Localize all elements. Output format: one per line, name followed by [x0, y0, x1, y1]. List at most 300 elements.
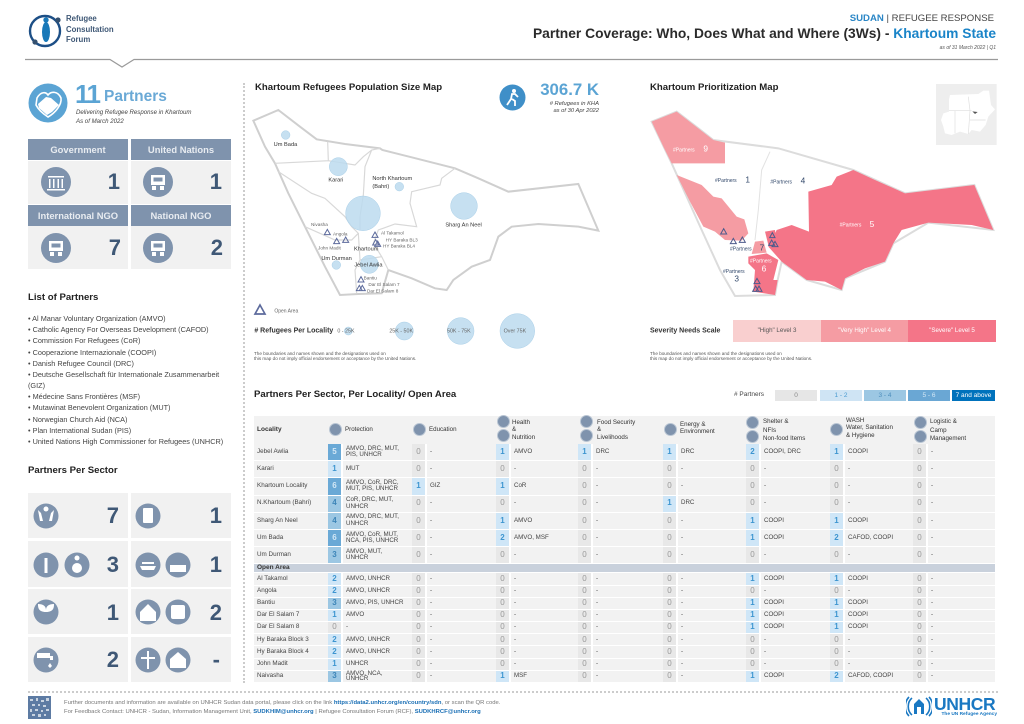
table: partners per sector per locality: 1 [834, 574, 839, 583]
panel: partners per sector: 1 [210, 552, 222, 577]
proportional bubbles [281, 131, 535, 348]
map disclaimer [650, 351, 812, 361]
map: refugee population by locality: Dar El Salam 8 [367, 289, 399, 294]
table: partners per sector per locality: 0 [582, 598, 587, 607]
map: refugee population by locality: Jebel Awlia [354, 263, 383, 269]
map disclaimer: The boundaries and names shown and the designations used on [650, 351, 782, 356]
logo: UNHCR: The UN Refugee Agency [941, 712, 997, 717]
table: partners per sector per locality: - [931, 448, 933, 455]
legend: number of partners: 0 [794, 392, 798, 399]
inset map of Sudan [936, 84, 997, 145]
table: partners per sector per locality: 0 [834, 586, 839, 595]
table: partners per sector per locality: AMVO, CoR, MUT, [346, 531, 398, 538]
table: partners per sector per locality: MUT, PIS, UNHCR [346, 485, 398, 492]
table: partners per sector per locality: 0 [917, 622, 922, 631]
table: partners per sector per locality: 0 [917, 659, 922, 668]
legend: number of partners: 7 and above [956, 392, 991, 399]
list of partners: • Plan International Sudan (PIS) [28, 426, 131, 435]
table: partners per sector per locality: COOPI, DRC [764, 448, 801, 455]
table: partners per sector per locality: - [596, 465, 598, 472]
table header: Energy & [680, 421, 705, 428]
title block: as of 31 March 2022 | Q1 [940, 45, 996, 51]
table: partners per sector per locality: - [764, 587, 766, 594]
table: partners per sector per locality: - [514, 611, 516, 618]
table: partners per sector per locality: AMVO, NCA, [346, 670, 382, 677]
table: partners per sector per locality: - [430, 465, 432, 472]
table header: Logistic & [930, 418, 957, 425]
partners total: Partners [104, 88, 167, 105]
table: partners per sector per locality: 0 [416, 598, 421, 607]
table: partners per sector per locality: 0 [500, 464, 505, 473]
map: refugee population by locality: Khartoum [354, 247, 379, 253]
table: partners per sector per locality: 1 [834, 447, 839, 456]
table: partners per sector per locality: 0 [917, 550, 922, 559]
table: partners per sector per locality: - [764, 482, 766, 489]
table: partners per sector per locality: 0 [582, 516, 587, 525]
table: partners per sector per locality: 0 [416, 671, 421, 680]
map: prioritization: 9 [703, 144, 708, 154]
table: partners per sector per locality: 0 [416, 498, 421, 507]
table: partners per sector per locality: - [931, 534, 933, 541]
table: partners per sector per locality: - [596, 611, 598, 618]
table header: Shelter & [763, 418, 788, 425]
table header: Non-food Items [763, 435, 805, 442]
table: partners per sector per locality: 2 [332, 647, 337, 656]
table: partners per sector per locality: - [596, 551, 598, 558]
table: partners per sector per locality: AMVO, UNHCR [346, 636, 390, 643]
table: partners per sector per locality: 0 [750, 647, 755, 656]
map: refugee population by locality: (Bahri) [372, 184, 389, 190]
table: partners per sector per locality: DRC [681, 499, 694, 506]
map: refugee population by locality: North Khartoum [372, 176, 413, 182]
table: partners per sector per locality: - [681, 534, 683, 541]
map: prioritization: 3 [734, 273, 739, 283]
table: partners per sector per locality: AMVO, UNHCR [346, 587, 390, 594]
table: partners per sector per locality: 0 [582, 533, 587, 542]
legend: number of partners [734, 390, 995, 401]
table: partners per sector per locality: - [514, 636, 516, 643]
map: prioritization [650, 84, 996, 335]
table: partners per sector per locality: 0 [834, 464, 839, 473]
table: partners per sector per locality: 0 [582, 574, 587, 583]
table: partners per sector per locality: - [430, 611, 432, 618]
table: partners per sector per locality: 0 [500, 498, 505, 507]
table: partners per sector per locality: 0 [834, 498, 839, 507]
map: prioritization: 5 [870, 219, 875, 229]
table: partners per sector per locality: 2 [834, 533, 839, 542]
table: partners per sector per locality: - [596, 660, 598, 667]
table: partners per sector per locality: COOPI [848, 611, 868, 618]
footer text: Further documents and information are available on UNHCR Sudan data portal, please click on the link https://data2.unhcr.org/en/country/sdn, or scan the QR code. [64, 700, 500, 706]
table: partners per sector per locality: COOPI [848, 623, 868, 630]
map: refugee population by locality: HY Baraka BL4 [383, 244, 415, 249]
heading: prioritization map: Khartoum Prioritization Map [650, 82, 778, 93]
table: partners per sector per locality: COOPI [764, 534, 784, 541]
table: partners per sector per locality: 0 [917, 516, 922, 525]
table: partners per sector per locality: 1 [500, 447, 505, 456]
severity scale: "High" Level 3 [758, 327, 796, 334]
table: partners per sector per locality: - [681, 636, 683, 643]
table: partners per sector per locality: 0 [582, 647, 587, 656]
table: partners per sector per locality: 0 [750, 464, 755, 473]
map: prioritization: 7 [760, 243, 765, 253]
map: refugee population by locality: Um Durman [321, 256, 352, 262]
panel: partner types: United Nations [148, 144, 214, 155]
logo: Refugee Consultation Forum: Refugee [66, 14, 97, 23]
table: partners per sector per locality: 1 [750, 598, 755, 607]
table: partners per sector per locality: AMVO [346, 611, 364, 618]
table: partners per sector per locality: - [848, 482, 850, 489]
table: partners per sector per locality: 0 [500, 586, 505, 595]
table: partners per sector per locality: GIZ [430, 482, 440, 489]
table: partners per sector per locality: AMVO, MUT, [346, 548, 382, 555]
table: partners per sector per locality: 2 [500, 533, 505, 542]
map: prioritization: #Partners [730, 247, 752, 253]
panel: partner types: 1 [210, 169, 222, 194]
table: partners per sector per locality: - [430, 575, 432, 582]
map: refugee population by locality: Nivasha [311, 222, 328, 227]
table: partners per sector per locality: - [596, 517, 598, 524]
table: partners per sector per locality: 1 [500, 671, 505, 680]
heading: partners per sector per locality: Partners Per Sector, Per Locality/ Open Area [254, 389, 456, 400]
table: partners per sector per locality: COOPI [764, 599, 784, 606]
icon: handshake [28, 84, 68, 122]
table: partners per sector per locality: 0 [582, 498, 587, 507]
table: partners per sector per locality: - [764, 465, 766, 472]
table header: NFIs [763, 426, 776, 434]
partners total [28, 79, 192, 125]
panel: partners per sector: 3 [107, 552, 119, 577]
legend: number of partners: # Partners [734, 391, 764, 398]
table: partners per sector per locality: - [681, 672, 683, 679]
panel: partners per sector [28, 493, 231, 682]
table: partners per sector per locality: 0 [917, 610, 922, 619]
table: partners per sector per locality: Dar El Salam 7 [257, 611, 299, 618]
footer text: For Feedback Contact: UNHCR - Sudan, Information Management Unit, SUDKHIM@unhcr.org | Refugee Consultation Forum (RCF), SUDKHRCF@unhcr.org [64, 709, 481, 715]
vertical dotted divider [243, 83, 245, 683]
map: refugee population by locality: Dar El Salam 7 [368, 282, 400, 287]
table: partners per sector per locality: - [931, 648, 933, 655]
table: partners per sector per locality: 4 [332, 498, 337, 507]
table: partners per sector per locality: 2 [834, 671, 839, 680]
table: partners per sector per locality: AMVO [514, 517, 532, 524]
table: partners per sector per locality: AMVO, CoR, DRC, [346, 479, 399, 486]
table: partners per sector per locality: - [681, 660, 683, 667]
table: partners per sector per locality: - [848, 648, 850, 655]
table: partners per sector per locality: John Madit [257, 660, 288, 667]
table: partners per sector per locality: 0 [750, 586, 755, 595]
table: partners per sector per locality: - [430, 587, 432, 594]
table: partners per sector per locality: DRC [596, 448, 609, 455]
table: partners per sector per locality: 0 [416, 533, 421, 542]
table: partners per sector per locality: 0 [416, 622, 421, 631]
table: partners per sector per locality: - [596, 482, 598, 489]
table: partners per sector per locality: - [681, 465, 683, 472]
table: partners per sector per locality: 1 [750, 671, 755, 680]
panel: partner types: Government [50, 144, 106, 155]
table: partners per sector per locality: - [764, 551, 766, 558]
table header: Locality [257, 426, 282, 433]
table: partners per sector per locality: 1 [750, 516, 755, 525]
table: partners per sector per locality: 0 [582, 464, 587, 473]
refugee total [500, 80, 599, 114]
list of partners: • Médecine Sans Frontières (MSF) [28, 392, 140, 401]
table header: & [512, 426, 516, 433]
map disclaimer: this map do not imply official endorsement or acceptance by the United Nations. [254, 356, 416, 361]
table: partners per sector per locality: CAFOD, COOPI [848, 534, 893, 541]
table: partners per sector per locality: - [596, 672, 598, 679]
list of partners [28, 314, 223, 446]
table: partners per sector per locality: 0 [500, 550, 505, 559]
table: partners per sector per locality: - [931, 611, 933, 618]
logo: UNHCR: UNHCR [934, 694, 995, 714]
table header: & [597, 426, 601, 433]
table: partners per sector per locality: 0 [667, 659, 672, 668]
table: partners per sector per locality: - [430, 517, 432, 524]
table: partners per sector per locality: AMVO, MSF [514, 534, 549, 541]
table: partners per sector per locality: - [596, 587, 598, 594]
table: partners per sector per locality: - [514, 499, 516, 506]
table: partners per sector per locality: 3 [332, 550, 337, 559]
table: partners per sector per locality: - [764, 499, 766, 506]
table: partners per sector per locality: Dar El Salam 8 [257, 623, 299, 630]
table: partners per sector per locality: 0 [416, 464, 421, 473]
table: partners per sector per locality: 0 [750, 550, 755, 559]
list of partners: • Norwegian Church Aid (NCA) [28, 415, 127, 424]
table: partners per sector per locality: CoR [514, 482, 526, 489]
table: partners per sector per locality: - [430, 599, 432, 606]
table: partners per sector per locality: - [681, 517, 683, 524]
table: partners per sector per locality: 0 [667, 574, 672, 583]
table: partners per sector per locality: 0 [416, 610, 421, 619]
table header: Livelihoods [597, 434, 628, 441]
table: partners per sector per locality: 0 [500, 610, 505, 619]
table: partners per sector per locality: - [931, 599, 933, 606]
table: partners per sector per locality: UNHCR [346, 503, 368, 510]
severity scale: "Very High" Level 4 [838, 327, 891, 334]
list of partners: • Commission For Refugees (CoR) [28, 336, 140, 345]
table header: Management [930, 435, 966, 442]
list of partners: • Al Manar Voluntary Organization (AMVO) [28, 314, 166, 323]
table: partners per sector per locality: - [764, 648, 766, 655]
table: partners per sector per locality: - [430, 660, 432, 667]
map: refugee population by locality: 25K - 50K [389, 328, 413, 334]
map: prioritization: 4 [801, 176, 806, 186]
table header: Water, Sanitation [846, 424, 893, 431]
table: partners per sector per locality: NCA, PIS, UNHCR [346, 537, 398, 544]
table: partners per sector per locality: CAFOD, COOPI [848, 672, 893, 679]
map: prioritization: #Partners [673, 147, 695, 153]
table: partners per sector per locality: COOPI [764, 517, 784, 524]
table: partners per sector per locality: 4 [332, 516, 337, 525]
table: partners per sector per locality: - [848, 660, 850, 667]
table: partners per sector per locality: COOPI [848, 448, 868, 455]
table: partners per sector per locality: 0 [917, 586, 922, 595]
table: partners per sector per locality: - [681, 611, 683, 618]
table: partners per sector per locality: 1 [332, 610, 337, 619]
table: partners per sector per locality: Um Durman [257, 551, 291, 558]
table: partners per sector per locality: - [848, 465, 850, 472]
table: partners per sector per locality: - [514, 599, 516, 606]
table: partners per sector per locality: 1 [582, 447, 587, 456]
table: partners per sector per locality: - [596, 575, 598, 582]
table: partners per sector per locality: Sharg An Neel [257, 517, 298, 524]
table: partners per sector per locality: 0 [917, 498, 922, 507]
table: partners per sector per locality: AMVO, UNHCR [346, 648, 390, 655]
table: partners per sector per locality: - [346, 623, 348, 630]
table: partners per sector per locality: 0 [582, 481, 587, 490]
table: partners per sector per locality: - [596, 599, 598, 606]
table: partners per sector per locality: 0 [667, 464, 672, 473]
table: partners per sector per locality: - [430, 623, 432, 630]
table: partners per sector per locality: - [681, 599, 683, 606]
map: refugee population by locality: 0 - 25K [337, 329, 355, 335]
table: partners per sector per locality: 0 [917, 635, 922, 644]
table: partners per sector per locality: - [514, 660, 516, 667]
map disclaimer: this map do not imply official endorsement or acceptance by the United Nations. [650, 356, 812, 361]
icon: running refugee [500, 84, 526, 110]
table: partners per sector per locality: 0 [917, 598, 922, 607]
table: partners per sector per locality: 5 [332, 447, 337, 456]
table: partners per sector per locality: 0 [582, 622, 587, 631]
table: partners per sector per locality: DRC [681, 448, 694, 455]
legend: number of partners: 3 - 4 [878, 392, 892, 399]
table: partners per sector per locality: 0 [750, 659, 755, 668]
map: refugee population by locality [252, 109, 600, 349]
table: partners per sector per locality: AMVO, DRC, MUT, [346, 445, 399, 452]
map: prioritization: 6 [762, 263, 767, 273]
list of partners: • Mutawinat Benevolent Organization (MUT) [28, 403, 170, 412]
table: partners per sector per locality: 0 [416, 447, 421, 456]
table: partners per sector per locality: 0 [332, 622, 337, 631]
table: partners per sector per locality: 1 [500, 516, 505, 525]
table: partners per sector per locality: Karari [257, 465, 274, 472]
panel: partner types [28, 139, 231, 269]
table: partners per sector per locality: 0 [834, 647, 839, 656]
title block [533, 13, 996, 51]
table: partners per sector per locality: AMVO, DRC, MUT, [346, 513, 399, 520]
map: prioritization: #Partners [840, 223, 862, 229]
panel: partners per sector: 2 [107, 647, 119, 672]
table: partners per sector per locality: Khartoum Locality [257, 482, 307, 489]
table: partners per sector per locality: - [430, 534, 432, 541]
table: partners per sector per locality: 0 [416, 659, 421, 668]
table: partners per sector per locality: 0 [582, 610, 587, 619]
table: partners per sector per locality: - [931, 517, 933, 524]
table: partners per sector per locality: - [848, 499, 850, 506]
list of partners: • Catholic Agency For Overseas Development (CAFOD) [28, 325, 209, 334]
table header: & Hygiene [846, 432, 875, 439]
heading: list of partners: List of Partners [28, 292, 98, 303]
map disclaimer: The boundaries and names shown and the designations used on [254, 351, 386, 356]
table: partners per sector per locality: - [931, 499, 933, 506]
map: prioritization: #Partners [715, 178, 737, 184]
refugee total: # Refugees in KHA [550, 101, 599, 107]
table: partners per sector per locality: 1 [667, 447, 672, 456]
table: partners per sector per locality: - [931, 551, 933, 558]
table: partners per sector per locality: - [596, 648, 598, 655]
table: partners per sector per locality: - [681, 648, 683, 655]
table: partners per sector per locality: 0 [416, 550, 421, 559]
map disclaimer [254, 351, 416, 361]
table: partners per sector per locality: 6 [332, 533, 337, 542]
table: partners per sector per locality: MUT [346, 465, 359, 472]
table: partners per sector per locality: - [430, 499, 432, 506]
table header: Education [429, 426, 457, 433]
table: partners per sector per locality: 0 [917, 464, 922, 473]
table: partners per sector per locality: 0 [500, 574, 505, 583]
table: partners per sector per locality: COOPI [764, 623, 784, 630]
list of partners: • United Nations High Commissioner for Refugees (UNHCR) [28, 437, 223, 446]
table: partners per sector per locality: 0 [750, 635, 755, 644]
header rule with chevron [25, 58, 998, 68]
table: partners per sector per locality: 0 [667, 550, 672, 559]
map: prioritization: Severity Needs Scale [650, 328, 721, 335]
table: partners per sector per locality: - [681, 482, 683, 489]
table: partners per sector per locality: - [681, 551, 683, 558]
table: partners per sector per locality: 0 [582, 635, 587, 644]
table: partners per sector per locality: - [931, 660, 933, 667]
table: partners per sector per locality: 1 [332, 659, 337, 668]
table: partners per sector per locality: 3 [332, 671, 337, 680]
panel: partner types: 1 [108, 169, 120, 194]
table: partners per sector per locality: 0 [750, 498, 755, 507]
table: partners per sector per locality: 0 [416, 586, 421, 595]
partners total: As of March 2022 [76, 118, 124, 125]
table: partners per sector per locality: Naivasha [257, 672, 283, 679]
severity scale: "Severe" Level 5 [929, 327, 975, 334]
table: partners per sector per locality: 0 [917, 574, 922, 583]
table: partners per sector per locality: AMVO, PIS, UNHCR [346, 599, 403, 606]
table: partners per sector per locality: 0 [667, 647, 672, 656]
map: refugee population by locality: Angola [333, 231, 348, 236]
map: prioritization: #Partners [770, 179, 793, 185]
table: partners per sector per locality: - [596, 636, 598, 643]
table: partners per sector per locality: 0 [667, 671, 672, 680]
table: partners per sector per locality: 6 [332, 481, 337, 490]
logo: Refugee Consultation Forum [28, 14, 114, 48]
map: prioritization: 1 [745, 174, 750, 184]
table: partners per sector per locality: Al Takamol [257, 575, 288, 582]
table: partners per sector per locality: N.Khartoum (Bahri) [257, 499, 311, 506]
table: partners per sector per locality: - [764, 636, 766, 643]
refugee total: 306.7 K [540, 80, 599, 99]
table: partners per sector per locality: - [514, 465, 516, 472]
list of partners: (GIZ) [28, 381, 45, 390]
map: refugee population by locality: # Refugees Per Locality [254, 328, 333, 335]
table: partners per sector per locality: 1 [667, 498, 672, 507]
panel: partners per sector: 1 [210, 503, 222, 528]
table: partners per sector per locality: - [681, 587, 683, 594]
map: refugee population by locality: Al Takamol [381, 231, 404, 236]
table: partners per sector per locality: UNHCR [346, 660, 368, 667]
legend: number of partners: 5 - 6 [922, 392, 936, 399]
legend: number of partners: 1 - 2 [834, 392, 848, 399]
table: partners per sector per locality: - [931, 672, 933, 679]
table: partners per sector per locality: MSF [514, 672, 527, 679]
panel: partners per sector: 7 [107, 503, 119, 528]
QR code [28, 696, 51, 719]
table header: Camp [930, 426, 947, 434]
partners total: 11 [75, 79, 100, 109]
table: partners per sector per locality: 0 [834, 481, 839, 490]
table: partners per sector per locality: 2 [332, 586, 337, 595]
table: partners per sector per locality: UNHCR [346, 520, 368, 527]
panel: partner types: National NGO [151, 210, 211, 221]
list of partners: • Deutsche Gesellschaft für Internationale Zusammenarbeit [28, 370, 219, 379]
table: partners per sector per locality: 0 [834, 659, 839, 668]
panel: partner types: 2 [211, 235, 223, 260]
